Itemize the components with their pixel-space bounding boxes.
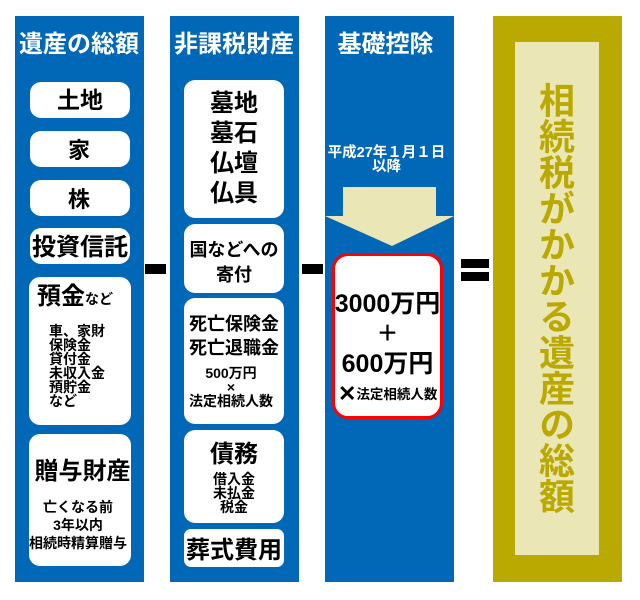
debts list: 未払金 [213, 485, 255, 501]
minus sign 2 [302, 264, 323, 274]
equals sign [461, 259, 489, 281]
item: stocks: 株 [68, 187, 90, 212]
insurance heading [189, 314, 279, 358]
amount: 30 million yen: 3000万円 [335, 290, 440, 318]
heading: total estate: 遺産の総額 [19, 31, 139, 58]
arrow: down [325, 187, 454, 246]
gifted assets note [29, 499, 127, 551]
item: investment trusts: 投資信託 [32, 234, 128, 261]
deposits list: 車、家財 [49, 323, 105, 339]
item: life insurance [184, 298, 284, 424]
item: donations: 寄付 [216, 264, 252, 284]
insurance formula: 500万円 [205, 365, 257, 381]
deposits list: など [49, 393, 77, 409]
item: donations: 国などへの [189, 240, 279, 260]
insurance formula: × [227, 379, 235, 395]
item: land: 土地 [57, 87, 103, 113]
date note: 平成27年１月１日 [328, 145, 445, 161]
item: debts [184, 430, 284, 523]
item: deposits [29, 277, 131, 425]
item: land [30, 82, 130, 118]
date note: 以降 [372, 159, 401, 175]
heading: basic deduction: 基礎控除 [338, 31, 434, 58]
amount: 6 million yen: 600万円 [342, 350, 433, 378]
insurance formula: 法定相続人数 [189, 393, 273, 409]
item: graves and altars: 墓地 [210, 90, 258, 117]
inner panel [515, 42, 599, 555]
per statutory heir: ✕法定相続人数 [338, 381, 437, 406]
item: funeral costs: 葬式費用 [186, 537, 282, 564]
deposits list: 保険金 [49, 337, 91, 353]
minus sign 1 [145, 264, 166, 274]
item: donations [184, 224, 284, 293]
item: gifted assets [29, 434, 131, 566]
plus sign: ＋ [376, 321, 398, 346]
insurance heading: 死亡退職金 [189, 338, 279, 358]
gifted assets note: 相続時精算贈与 [29, 535, 127, 551]
item: house [30, 131, 130, 167]
gifted assets heading: 贈与財産 [34, 458, 130, 485]
panel: taxable estate [493, 16, 622, 582]
heading: non-taxable assets: 非課税財産 [174, 31, 294, 58]
insurance heading: 死亡保険金 [189, 314, 279, 334]
debts list [213, 471, 255, 515]
deduction formula box [332, 253, 443, 419]
item: funeral costs [184, 529, 284, 567]
debts list: 税金 [220, 499, 248, 515]
panel: non-taxable assets [170, 16, 299, 582]
item: graves and altars: 仏具 [210, 180, 258, 207]
item: graves and altars [184, 80, 284, 218]
item: graves and altars: 墓石 [210, 120, 258, 147]
debts heading: 債務 [210, 441, 258, 468]
gifted assets note: 亡くなる前 [43, 499, 113, 515]
deposits heading: 預金など [37, 283, 113, 310]
panel: total estate [15, 16, 144, 582]
debts list: 借入金 [213, 471, 255, 487]
item: graves and altars: 仏壇 [210, 150, 258, 177]
item: stocks [30, 180, 130, 216]
deposits list [49, 323, 105, 409]
date note [328, 144, 445, 175]
gifted assets note: 3年以内 [53, 517, 103, 533]
result text: 相続税がかかる遺産の総額 [534, 82, 575, 514]
insurance formula [189, 365, 273, 409]
deposits list: 預貯金 [49, 379, 91, 395]
panel: basic deduction [325, 16, 454, 582]
deposits list: 未収入金 [49, 365, 105, 381]
item: house: 家 [68, 138, 90, 163]
deposits list: 貸付金 [49, 351, 91, 367]
